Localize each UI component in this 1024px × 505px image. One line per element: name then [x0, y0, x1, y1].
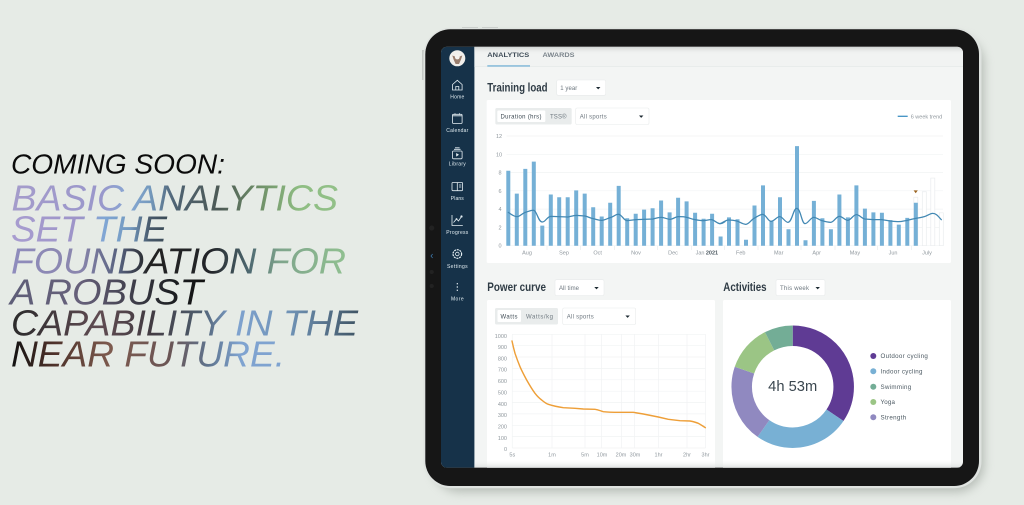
legend: Strength — [880, 414, 907, 422]
tablet bezel — [422, 27, 982, 488]
legend: Indoor cycling — [880, 368, 923, 376]
x axis month labels: Aug — [522, 250, 532, 256]
y axis labels — [495, 334, 507, 453]
x axis month labels: 2021 — [706, 250, 718, 256]
panel: training load chart — [487, 100, 951, 263]
heading: coming soon: COMING SOON: — [11, 148, 225, 179]
marker: award — [914, 190, 918, 193]
dropdown: all time: All time — [559, 286, 580, 292]
y axis labels: 800 — [498, 356, 507, 362]
dropdown: all sports: All sports — [567, 315, 594, 321]
x axis labels: 5m — [581, 452, 589, 458]
x axis labels: 3hr — [702, 452, 710, 458]
nav item: plans: Plans — [451, 196, 464, 202]
heading: power curve: Power curve — [487, 282, 546, 294]
y axis labels: 4 — [498, 207, 502, 213]
y axis labels: 8 — [498, 171, 502, 177]
x axis labels: 1m — [548, 452, 556, 458]
x axis labels: 2hr — [683, 452, 691, 458]
toggle: watts or watts per kg: Watts — [500, 314, 518, 320]
projected weeks ghost bars — [914, 178, 943, 246]
x axis labels — [510, 452, 710, 456]
nav item: progress — [446, 215, 469, 236]
x axis month labels: Oct — [593, 250, 602, 256]
toggle: duration or TSS: Duration (hrs) — [500, 115, 542, 121]
x axis month labels: Dec — [668, 250, 678, 256]
legend: 6 week trend: 6 week trend — [911, 115, 942, 121]
tab bar — [474, 47, 963, 67]
panel: power curve chart — [487, 300, 715, 470]
headline line 4: A ROBUST — [8, 271, 206, 312]
y axis labels — [496, 134, 502, 250]
panel: activities donut — [723, 300, 951, 470]
nav item: calendar: Calendar — [446, 128, 469, 134]
dropdown: 1 year — [557, 80, 606, 95]
toggle: duration or TSS: TSS® — [550, 113, 567, 120]
nav item: settings: Settings — [447, 264, 468, 270]
y axis labels: 0 — [504, 447, 507, 453]
toggle: duration or TSS — [495, 108, 572, 124]
tablet mockup — [422, 27, 982, 488]
donut chart — [742, 336, 844, 438]
y axis labels: 900 — [498, 345, 507, 351]
x axis month labels: Nov — [631, 250, 641, 256]
nav item: more — [451, 283, 464, 300]
nav item: home: Home — [450, 94, 465, 100]
tab: analytics: ANALYTICS — [487, 52, 530, 59]
y axis labels: 300 — [498, 413, 507, 419]
y axis labels: 600 — [498, 379, 507, 385]
x axis month labels: Sep — [559, 250, 569, 256]
dropdown: this week — [776, 280, 825, 296]
dropdown: all sports — [576, 108, 649, 124]
x axis month labels: May — [850, 250, 860, 256]
y axis labels: 0 — [498, 244, 502, 250]
y axis labels: 1000 — [495, 334, 507, 340]
x axis labels: 5s — [509, 452, 515, 458]
heading: training load: Training load — [487, 82, 548, 94]
nav item: plans — [451, 182, 464, 200]
x axis month labels — [522, 250, 932, 256]
nav item: more: More — [451, 296, 464, 302]
weekly duration bars — [508, 146, 916, 246]
x axis month labels: Mar — [774, 250, 784, 256]
legend: Swimming — [880, 384, 912, 391]
nav item: settings — [447, 250, 468, 270]
avatar — [449, 50, 465, 66]
power curve line — [512, 341, 705, 428]
donut total: 4h 53m — [768, 379, 817, 395]
tablet screen — [441, 47, 963, 470]
y axis labels: 2 — [498, 225, 502, 231]
sidebar navigation — [441, 47, 474, 468]
headline line 3: FOUNDATION FOR — [11, 240, 346, 281]
x axis month labels: Jan — [696, 250, 704, 256]
y axis labels: 100 — [498, 436, 507, 442]
y axis labels: 400 — [498, 402, 507, 408]
heading: activities: Activities — [723, 282, 767, 294]
nav item: calendar — [446, 113, 469, 134]
dropdown: 1 year: 1 year — [560, 86, 577, 92]
nav item: progress: Progress — [446, 230, 469, 236]
nav item: library — [449, 148, 466, 168]
x axis labels: 10m — [597, 452, 608, 458]
x axis labels: 30m — [630, 452, 641, 458]
legend: 6 week trend — [898, 114, 942, 118]
dropdown: this week: This week — [780, 286, 810, 292]
dropdown: all sports — [563, 308, 636, 324]
y axis labels: 500 — [498, 390, 507, 396]
x axis month labels: July — [922, 250, 932, 256]
legend: Yoga — [880, 399, 896, 406]
toggle: watts or watts per kg — [495, 308, 558, 324]
six week trend line — [508, 208, 941, 224]
headline line 1: BASIC ANALYTICS — [12, 178, 338, 219]
headline line 6: NEAR FUTURE. — [11, 334, 285, 375]
headline line 2: SET THE — [11, 209, 168, 250]
toggle: watts or watts per kg: Watts/kg — [526, 314, 553, 320]
x axis labels: 20m — [616, 452, 627, 458]
nav item: home — [450, 80, 465, 100]
x axis month labels: Feb — [736, 250, 745, 256]
legend: Outdoor cycling — [880, 353, 928, 360]
nav item: library: Library — [449, 162, 466, 168]
x axis labels: 1hr — [655, 452, 663, 458]
x axis month labels: Apr — [812, 250, 821, 256]
y axis labels: 700 — [498, 368, 507, 374]
y axis labels: 10 — [496, 152, 502, 158]
x axis month labels: Jun — [889, 250, 897, 256]
y axis labels: 200 — [498, 424, 507, 430]
headline text block — [8, 148, 359, 375]
tab: awards: AWARDS — [542, 52, 575, 59]
headline line 5: CAPABILITY IN THE — [11, 303, 359, 344]
dropdown: all sports: All sports — [580, 115, 607, 121]
dropdown: all time — [555, 280, 604, 296]
y axis labels: 12 — [496, 134, 502, 140]
legend — [870, 353, 928, 422]
y axis labels: 6 — [498, 189, 502, 195]
